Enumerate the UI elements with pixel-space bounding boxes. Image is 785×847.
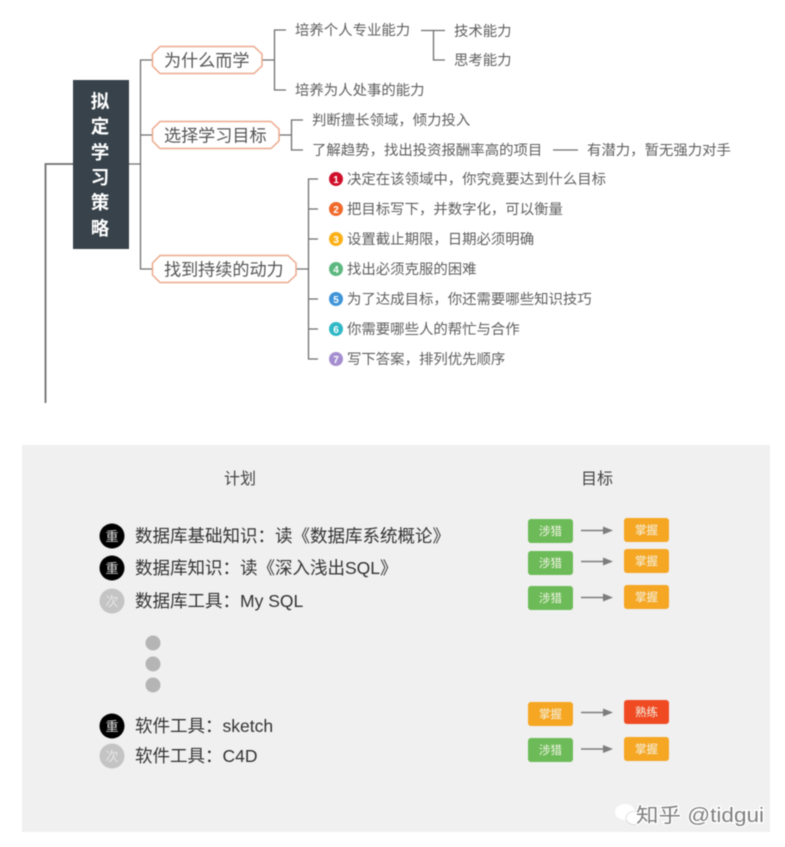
- plan row 2: 数据库知识：读《深入浅出SQL》: [135, 558, 398, 578]
- plan row 3: 次: [105, 594, 119, 609]
- plan row 1: 重: [105, 529, 119, 544]
- plan row 5: [100, 744, 258, 768]
- heading: 计划: 计划: [224, 470, 256, 488]
- mind map: [46, 22, 731, 403]
- central node: 拟定学习策略: 学: [91, 142, 109, 163]
- central node: 拟定学习策略: 定: [91, 116, 109, 137]
- plan row 2: 重: [105, 561, 119, 576]
- goal row 4: 熟练: [635, 705, 658, 719]
- goal row 3: [528, 585, 669, 610]
- goal row 3: 掌握: [635, 590, 658, 604]
- step 2: 把目标写下，并数字化，可以衡量: [347, 201, 563, 218]
- step 7: 写下答案，排列优先顺序: [347, 350, 505, 368]
- plan row 5: 次: [105, 749, 119, 764]
- step 4: 找出必须克服的困难: [347, 261, 477, 278]
- branch: 为什么而学: 培养个人专业能力: [295, 22, 410, 39]
- step 1: 决定在该领域中，你究竟要达到什么目标: [347, 171, 606, 188]
- central node: 拟定学习策略: [73, 80, 129, 249]
- plan row 4: [100, 714, 273, 738]
- step 6: 6: [333, 325, 339, 336]
- step 3: 3: [333, 235, 339, 246]
- branch: 为什么而学: 技术能力: [454, 23, 512, 40]
- goal row 2: [528, 549, 669, 575]
- goal row 4: [528, 700, 669, 726]
- step 4: 4: [333, 265, 339, 276]
- plan row 1: 数据库基础知识：读《数据库系统概论》: [135, 526, 450, 546]
- ellipsis dots: [146, 636, 160, 692]
- step 1: 1: [333, 175, 339, 186]
- plan row 3: [100, 588, 303, 614]
- goal row 1: 涉猎: [539, 524, 562, 538]
- branch: 选择学习目标: 了解趋势，找出投资报酬率高的项目: [312, 142, 542, 159]
- plan row 4: 软件工具：sketch: [135, 716, 273, 736]
- goal row 1: 掌握: [635, 523, 658, 537]
- step 3: 设置截止期限，日期必须明确: [347, 231, 534, 248]
- goal row 2: 掌握: [635, 554, 658, 568]
- branch: 选择学习目标: 判断擅长领域，倾力投入: [312, 111, 470, 129]
- panel: plan and goals: [22, 445, 770, 832]
- central node: 拟定学习策略: 策: [91, 192, 110, 213]
- watermark: 知乎 @tidgui: [636, 804, 764, 827]
- plan row 4: 重: [105, 719, 119, 734]
- step 6: 你需要哪些人的帮忙与合作: [347, 321, 520, 338]
- goal row 3: 涉猎: [539, 591, 562, 605]
- branch: 找到持续的动力: 找到持续的动力: [164, 260, 284, 280]
- step 5: 为了达成目标，你还需要哪些知识技巧: [347, 291, 592, 308]
- branch: 选择学习目标: 选择学习目标: [164, 126, 267, 146]
- goal row 5: [528, 737, 669, 762]
- branch: 选择学习目标: [152, 111, 731, 159]
- heading: 目标: 目标: [581, 470, 613, 488]
- goal row 2: 涉猎: [539, 556, 562, 570]
- goal row 1: [528, 518, 669, 543]
- central node: 拟定学习策略: 略: [91, 218, 110, 239]
- step 2: 2: [333, 205, 339, 216]
- central node: 拟定学习策略: 习: [91, 167, 109, 188]
- branch: 找到持续的动力: [152, 171, 606, 368]
- branch: 选择学习目标: 有潜力，暂无强力对手: [587, 142, 731, 159]
- step 7: 7: [333, 355, 339, 366]
- branch: 为什么而学: 为什么而学: [164, 52, 249, 70]
- goal row 5: 掌握: [635, 742, 658, 756]
- central node: 拟定学习策略: 拟: [91, 91, 110, 112]
- main branch connectors: [129, 60, 152, 269]
- branch: 为什么而学: 培养为人处事的能力: [295, 82, 425, 99]
- plan row 5: 软件工具：C4D: [135, 746, 258, 766]
- step 5: 5: [333, 295, 339, 306]
- trunk connector: [46, 164, 73, 403]
- branch: 为什么而学: 思考能力: [454, 52, 512, 69]
- goal row 5: 涉猎: [539, 743, 562, 757]
- goal row 4: 掌握: [539, 707, 562, 721]
- branch: 为什么而学: [152, 22, 512, 99]
- plan row 3: 数据库工具：My SQL: [135, 591, 303, 611]
